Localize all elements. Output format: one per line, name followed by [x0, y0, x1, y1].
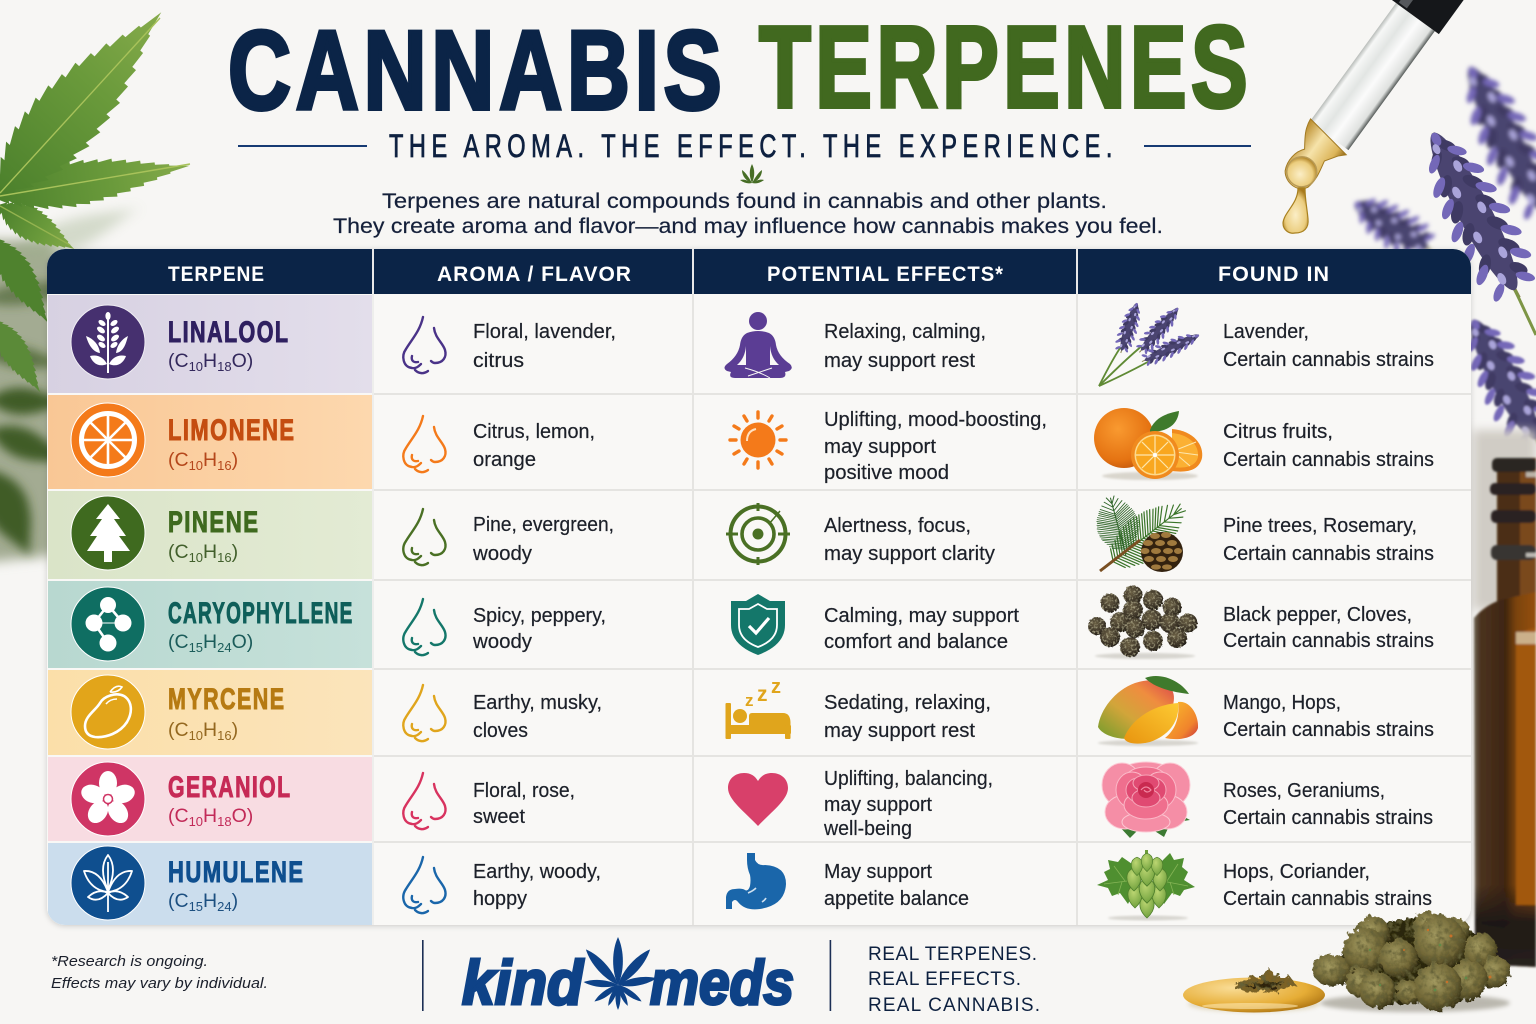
terpene cell: linalool [48, 295, 372, 393]
found-in text: geraniol [1223, 780, 1433, 829]
title [228, 2, 1252, 133]
intro text [333, 189, 1163, 238]
found-in text: linalool: Certain cannabis strains [1223, 349, 1434, 371]
logo: kind meds: meds [650, 949, 794, 1018]
terpene cell: limonene: 16 [217, 458, 232, 473]
logo divider, right [830, 940, 831, 1011]
effects text: caryophyllene [824, 606, 1019, 648]
resin puddle with bud [1183, 968, 1325, 1012]
terpene cell: limonene: H [203, 449, 217, 471]
icon: nose, teal [403, 599, 446, 655]
aroma text: limonene: Citrus, lemon, [473, 421, 595, 443]
aroma text: humulene [473, 861, 601, 910]
aroma text: linalool: Floral, lavender, [473, 321, 616, 343]
found-in text: limonene: Certain cannabis strains [1223, 449, 1434, 471]
terpene cell: pinene: H [203, 541, 217, 563]
aroma text: geraniol: sweet [473, 806, 525, 828]
footnote [51, 953, 268, 992]
icon: meditating person [724, 312, 792, 378]
icon: logo cannabis leaf [582, 937, 657, 1010]
icon: bed with zzz: z [745, 691, 754, 710]
aroma text: linalool: citrus [473, 350, 524, 372]
found-in text: caryophyllene: Black pepper, Cloves, [1223, 604, 1412, 626]
row separators [373, 294, 1471, 925]
effects text: linalool: may support rest [824, 350, 975, 372]
found-in text: humulene: Certain cannabis strains [1223, 888, 1432, 910]
terpene cell: geraniol: O) [232, 805, 253, 827]
found-in text: caryophyllene [1224, 606, 1434, 648]
aroma text: humulene: Earthy, woody, [473, 861, 601, 883]
found-in text: geraniol: Roses, Geraniums, [1223, 780, 1385, 802]
effects text: pinene: Alertness, focus, [824, 515, 971, 537]
row: pinene [48, 490, 1434, 586]
found-in text: humulene [1223, 861, 1432, 910]
terpene cell: limonene [48, 395, 372, 489]
aroma text: geraniol: Floral, rose, [473, 780, 575, 802]
row: limonene [48, 395, 1434, 489]
terpene cell: pinene: 16 [217, 550, 232, 565]
icon: sun [730, 412, 786, 468]
cannabis leaf, top left [0, 0, 193, 400]
aroma text: caryophyllene: woody [472, 631, 532, 653]
effects text: pinene: may support clarity [824, 543, 995, 565]
subtitle with rules: THE AROMA. THE EFFECT. THE EXPERIENCE. [389, 128, 1118, 164]
found-in text: pinene [1224, 516, 1434, 560]
found-in text: linalool [1224, 322, 1434, 366]
icon: nose, blue [403, 857, 446, 913]
blurred plant behind table, left [0, 192, 146, 566]
terpene cell: linalool: LINALOOL [168, 316, 290, 349]
footnote: Effects may vary by individual. [51, 975, 268, 992]
icon: shield with check [731, 594, 785, 655]
aroma text: geraniol [473, 780, 575, 828]
intro text: Terpenes are natural compounds found in cannabis and other plants. [382, 189, 1107, 213]
row: caryophyllene [48, 581, 1434, 668]
found-in text: limonene: Citrus fruits, [1223, 421, 1333, 443]
terpene cell: caryophyllene: H [203, 631, 217, 653]
terpene cell: humulene: ) [232, 890, 238, 912]
effects text: pinene [824, 515, 995, 565]
logo: kind meds: kind [462, 949, 584, 1018]
effects text: limonene: positive mood [824, 462, 949, 484]
terpene cell: myrcene: H [203, 719, 217, 741]
aroma text: limonene [473, 421, 595, 471]
terpene cell: humulene: (C [168, 890, 189, 912]
effects text: caryophyllene: Calming, may support [824, 605, 1019, 627]
table card [47, 249, 1471, 925]
icon: stomach [726, 853, 786, 909]
effects text: limonene [824, 409, 1047, 484]
aroma text: myrcene: Earthy, musky, [473, 692, 602, 714]
icon: nose, green [403, 509, 446, 565]
effects text: geraniol [823, 768, 993, 840]
effects text: geraniol: well-being [823, 818, 912, 840]
terpene cell: geraniol: 10 [189, 814, 203, 829]
intro text: They create aroma and flavor—and may influence how cannabis makes you feel. [333, 214, 1163, 238]
icon: bed with zzz: z [757, 683, 768, 706]
effects text: myrcene: may support rest [824, 720, 975, 742]
found-in text: limonene [1224, 422, 1434, 466]
terpene cell: humulene [48, 843, 372, 925]
effects text: geraniol: Uplifting, balancing, [824, 768, 993, 790]
row: myrcene [48, 670, 1434, 755]
aroma text: myrcene: cloves [473, 720, 528, 742]
aroma text: pinene: Pine, evergreen, [473, 514, 614, 536]
tagline: REAL CANNABIS. [868, 995, 1040, 1016]
terpene cell: limonene: 10 [189, 458, 203, 473]
terpene cell: humulene: HUMULENE [168, 856, 304, 889]
found-in text: humulene: Hops, Coriander, [1223, 861, 1370, 883]
illustration: mango [1098, 676, 1198, 746]
effects text: limonene: may support [824, 436, 936, 458]
terpene cell: geraniol [48, 757, 372, 841]
aroma text: pinene: woody [472, 543, 532, 565]
terpene cell: caryophyllene: CARYOPHYLLENE [168, 597, 354, 630]
logo divider, left [422, 940, 424, 1011]
effects text: myrcene: Sedating, relaxing, [824, 692, 991, 714]
terpene cell: caryophyllene: 15 [189, 640, 203, 655]
footnote: *Research is ongoing. [51, 953, 208, 970]
row: linalool [48, 295, 1434, 393]
column divider, terpene to aroma [372, 294, 374, 925]
amber bottle, right edge [1473, 430, 1536, 967]
icon: nose, purple [403, 317, 446, 373]
found-in text: caryophyllene: Certain cannabis strains [1223, 630, 1434, 652]
terpene cell: pinene: (C [168, 541, 189, 563]
terpene cell: myrcene [48, 670, 372, 755]
terpene cell: limonene: (C [168, 449, 189, 471]
illustration: rose [1102, 762, 1190, 838]
effects text: humulene: May support [824, 861, 932, 883]
header row: TERPENE [168, 263, 265, 286]
aroma text: pinene [472, 514, 614, 565]
header row: POTENTIAL EFFECTS* [767, 263, 1004, 286]
aroma text: caryophyllene: Spicy, peppery, [473, 605, 606, 627]
found-in text: myrcene: Certain cannabis strains [1223, 719, 1434, 741]
title: CANNABIS [228, 8, 726, 133]
icon: nose, pink [403, 773, 446, 829]
icon: bed with zzz [726, 676, 791, 739]
effects text: linalool: Relaxing, calming, [824, 321, 986, 343]
header row [47, 249, 1471, 294]
terpene cell: pinene [48, 491, 372, 579]
found-in text: myrcene [1223, 692, 1434, 741]
found-in text: linalool: Lavender, [1223, 321, 1309, 343]
cannabis buds [1313, 911, 1511, 1012]
icon: nose, orange [403, 416, 446, 472]
effects text: caryophyllene: comfort and balance [824, 631, 1008, 653]
terpene cell: myrcene: ) [232, 719, 238, 741]
terpene cell: pinene: 10 [189, 550, 203, 565]
terpene cell: myrcene: 16 [217, 728, 232, 743]
icon: heart [728, 773, 788, 826]
row: humulene [48, 843, 1432, 925]
illustration: pine branch and cone [1096, 496, 1186, 572]
terpene cell: geraniol: (C [168, 805, 189, 827]
aroma text: limonene: orange [473, 449, 536, 471]
aroma text: humulene: hoppy [473, 888, 527, 910]
terpene cell: linalool: H [203, 350, 217, 372]
tagline: REAL TERPENES. [868, 944, 1037, 965]
effects text: humulene: appetite balance [824, 888, 969, 910]
illustration: black pepper [1088, 586, 1198, 659]
terpene cell: myrcene: MYRCENE [168, 683, 286, 716]
header row: FOUND IN [1218, 263, 1330, 286]
terpene cell: linalool: (C [168, 350, 189, 372]
terpene cell: linalool: 10 [189, 359, 203, 374]
found-in text: myrcene: Mango, Hops, [1223, 692, 1341, 714]
illustration: oranges [1094, 408, 1202, 480]
effects text: limonene: Uplifting, mood-boosting, [824, 409, 1047, 431]
terpene cell: caryophyllene: 24 [217, 640, 232, 655]
icon: bed with zzz: z [771, 676, 781, 698]
icon: target [726, 503, 790, 565]
tagline [868, 944, 1040, 1016]
illustration: lavender sprigs [1099, 300, 1203, 386]
found-in text: geraniol: Certain cannabis strains [1223, 807, 1433, 829]
icon: small cannabis leaf [740, 164, 764, 183]
aroma text: myrcene [474, 694, 600, 738]
found-in text: pinene: Pine trees, Rosemary, [1223, 515, 1417, 537]
terpene table [47, 249, 1471, 925]
terpene cell: caryophyllene: O) [232, 631, 253, 653]
tagline: REAL EFFECTS. [868, 969, 1021, 990]
terpene cell: humulene: 15 [189, 899, 203, 914]
effects text: linalool [824, 321, 986, 372]
terpene cell: caryophyllene: (C [168, 631, 189, 653]
row: geraniol [48, 757, 1433, 841]
terpene cell: myrcene: 10 [189, 728, 203, 743]
header row: AROMA / FLAVOR [437, 263, 632, 286]
lavender sprigs, top right [1342, 53, 1536, 460]
effects text: humulene [824, 861, 969, 910]
title: TERPENES [759, 2, 1252, 132]
terpene cell: linalool: O) [232, 350, 253, 372]
terpene cell: geraniol: H [203, 805, 217, 827]
terpene cell: humulene: H [203, 890, 217, 912]
terpene cell: geraniol: GERANIOL [168, 771, 292, 804]
effects text: myrcene [824, 692, 991, 742]
terpene cell: geraniol: 18 [217, 814, 232, 829]
terpene cell: caryophyllene [48, 581, 372, 668]
dropper with oil drop [1269, 0, 1477, 233]
terpene cell: pinene: ) [232, 541, 238, 563]
effects text: geraniol: may support [824, 794, 932, 816]
icon: nose, gold [403, 685, 446, 741]
terpene cell: limonene: LIMONENE [168, 414, 296, 447]
terpene cell: pinene: PINENE [168, 506, 260, 539]
aroma text: caryophyllene [472, 605, 606, 653]
terpene cell: linalool: 18 [217, 359, 232, 374]
terpene cell: myrcene: (C [168, 719, 189, 741]
aroma text: linalool [474, 322, 614, 368]
terpene cell: limonene: ) [232, 449, 238, 471]
found-in text: pinene: Certain cannabis strains [1223, 543, 1434, 565]
logo: kind meds [462, 937, 794, 1018]
illustration: hops [1097, 850, 1195, 920]
terpene cell: humulene: 24 [217, 899, 232, 914]
